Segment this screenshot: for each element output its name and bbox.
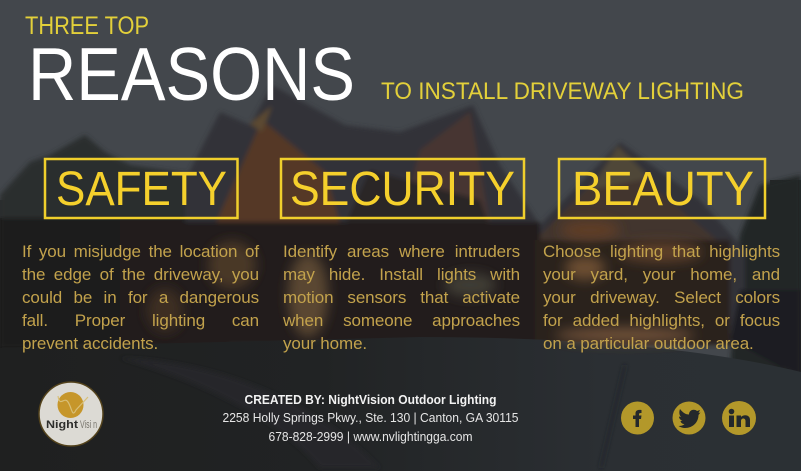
icon: twitter (672, 402, 706, 434)
address: 2258 Holly Springs Pkwy., Ste. 130 | Canton, GA 30115 (222, 411, 519, 425)
warm glows (147, 288, 183, 332)
text: security description: when someone approaches (283, 311, 520, 330)
brick gable, centre (215, 120, 345, 240)
text: beauty description (543, 242, 780, 353)
main roofs (185, 85, 745, 345)
text: beauty description: on a particular outdoor area. (543, 334, 754, 353)
text: safety description: could be in for a dangerous (22, 288, 259, 307)
logo: NightVision: Night (46, 419, 78, 431)
box: safety: SAFETY (56, 163, 227, 216)
credit: created by: CREATED BY: NightVision Outdoor Lighting (244, 393, 496, 407)
box: beauty: BEAUTY (572, 163, 754, 216)
eyebrow: three top: THREE TOP (25, 12, 149, 40)
ground (0, 337, 801, 471)
text: safety description: the edge of the driveway, you (22, 265, 259, 284)
text: security description: may hide. Install lights with (283, 265, 520, 284)
icon: linkedin (722, 401, 756, 435)
box: security: SECURITY (290, 163, 515, 216)
text: safety description: If you misjudge the location of (22, 242, 259, 261)
subtitle: TO INSTALL DRIVEWAY LIGHTING (381, 78, 744, 105)
trees left (0, 135, 230, 250)
contact: 678-828-2999 | www.nvlightingga.com (268, 430, 472, 444)
title: reasons: REASONS (28, 32, 355, 116)
text: beauty description: Choose lighting that highlights (543, 242, 780, 261)
lower house (120, 222, 540, 345)
text: safety description: fall. Proper lighting can (22, 311, 259, 330)
right gable (535, 158, 735, 255)
text: security description: Identify areas where intruders (283, 242, 520, 261)
logo: NightVision: Visi n (80, 419, 97, 431)
text: security description: motion sensors that activate (283, 288, 520, 307)
text: beauty description: your yard, your home, and (543, 265, 780, 284)
logo: NightVision (39, 382, 103, 446)
text: safety description: prevent accidents. (22, 334, 158, 353)
text: security description: your home. (283, 334, 367, 353)
trees right (730, 175, 801, 370)
text: security description (283, 242, 520, 353)
text: safety description (22, 242, 260, 353)
icon: facebook (621, 402, 654, 434)
unblurred edge underlay (0, 200, 20, 220)
text: beauty description: your driveway. Select colors (543, 288, 780, 307)
text: beauty description: for added highlights, or focus (543, 311, 780, 330)
